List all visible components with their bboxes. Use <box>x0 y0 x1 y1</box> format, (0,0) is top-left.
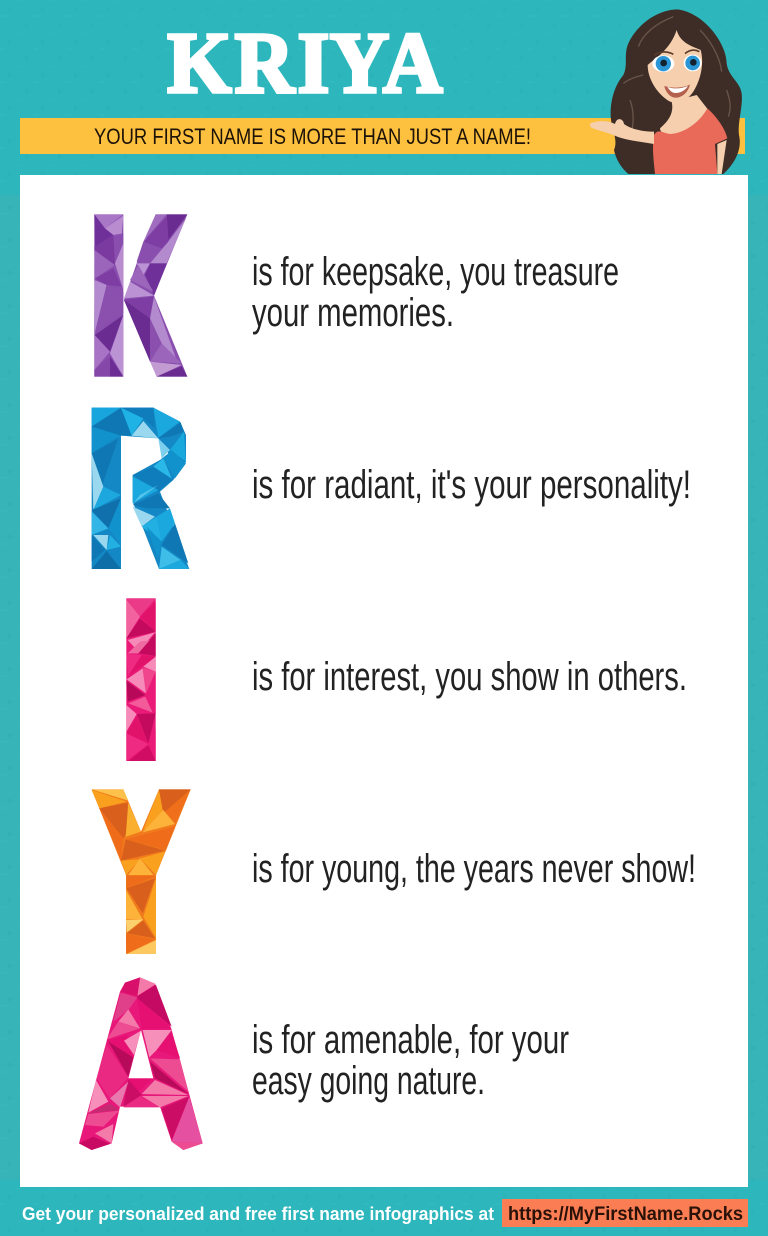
text: A line: easy going nature. <box>252 1059 485 1103</box>
smile <box>664 85 690 98</box>
icon: letter K <box>94 214 187 377</box>
face <box>648 30 702 102</box>
top <box>653 108 727 174</box>
subtitle banner: YOUR FIRST NAME IS MORE THAN JUST A NAME! <box>94 124 531 149</box>
footer url badge: https://MyFirstName.Rocks <box>508 1204 743 1225</box>
text: K line: your memories. <box>252 291 454 335</box>
text: K line: is for keepsake, you treasure <box>252 250 619 294</box>
subtitle banner <box>20 118 745 154</box>
icon: letter I <box>126 598 156 761</box>
footer text: Get your personalized and free first name infographics at <box>22 1204 494 1224</box>
arm and hand <box>590 119 654 144</box>
neck and chest <box>660 95 708 135</box>
icon: letter Y <box>92 789 191 954</box>
title: KRIYA <box>167 15 443 111</box>
panel: white content card <box>20 175 748 1187</box>
text: A line: is for amenable, for your <box>252 1018 569 1062</box>
eyes <box>652 55 702 72</box>
icon: cartoon woman <box>590 9 742 174</box>
icon: letter R <box>92 408 189 569</box>
icon: letter A <box>79 977 203 1150</box>
